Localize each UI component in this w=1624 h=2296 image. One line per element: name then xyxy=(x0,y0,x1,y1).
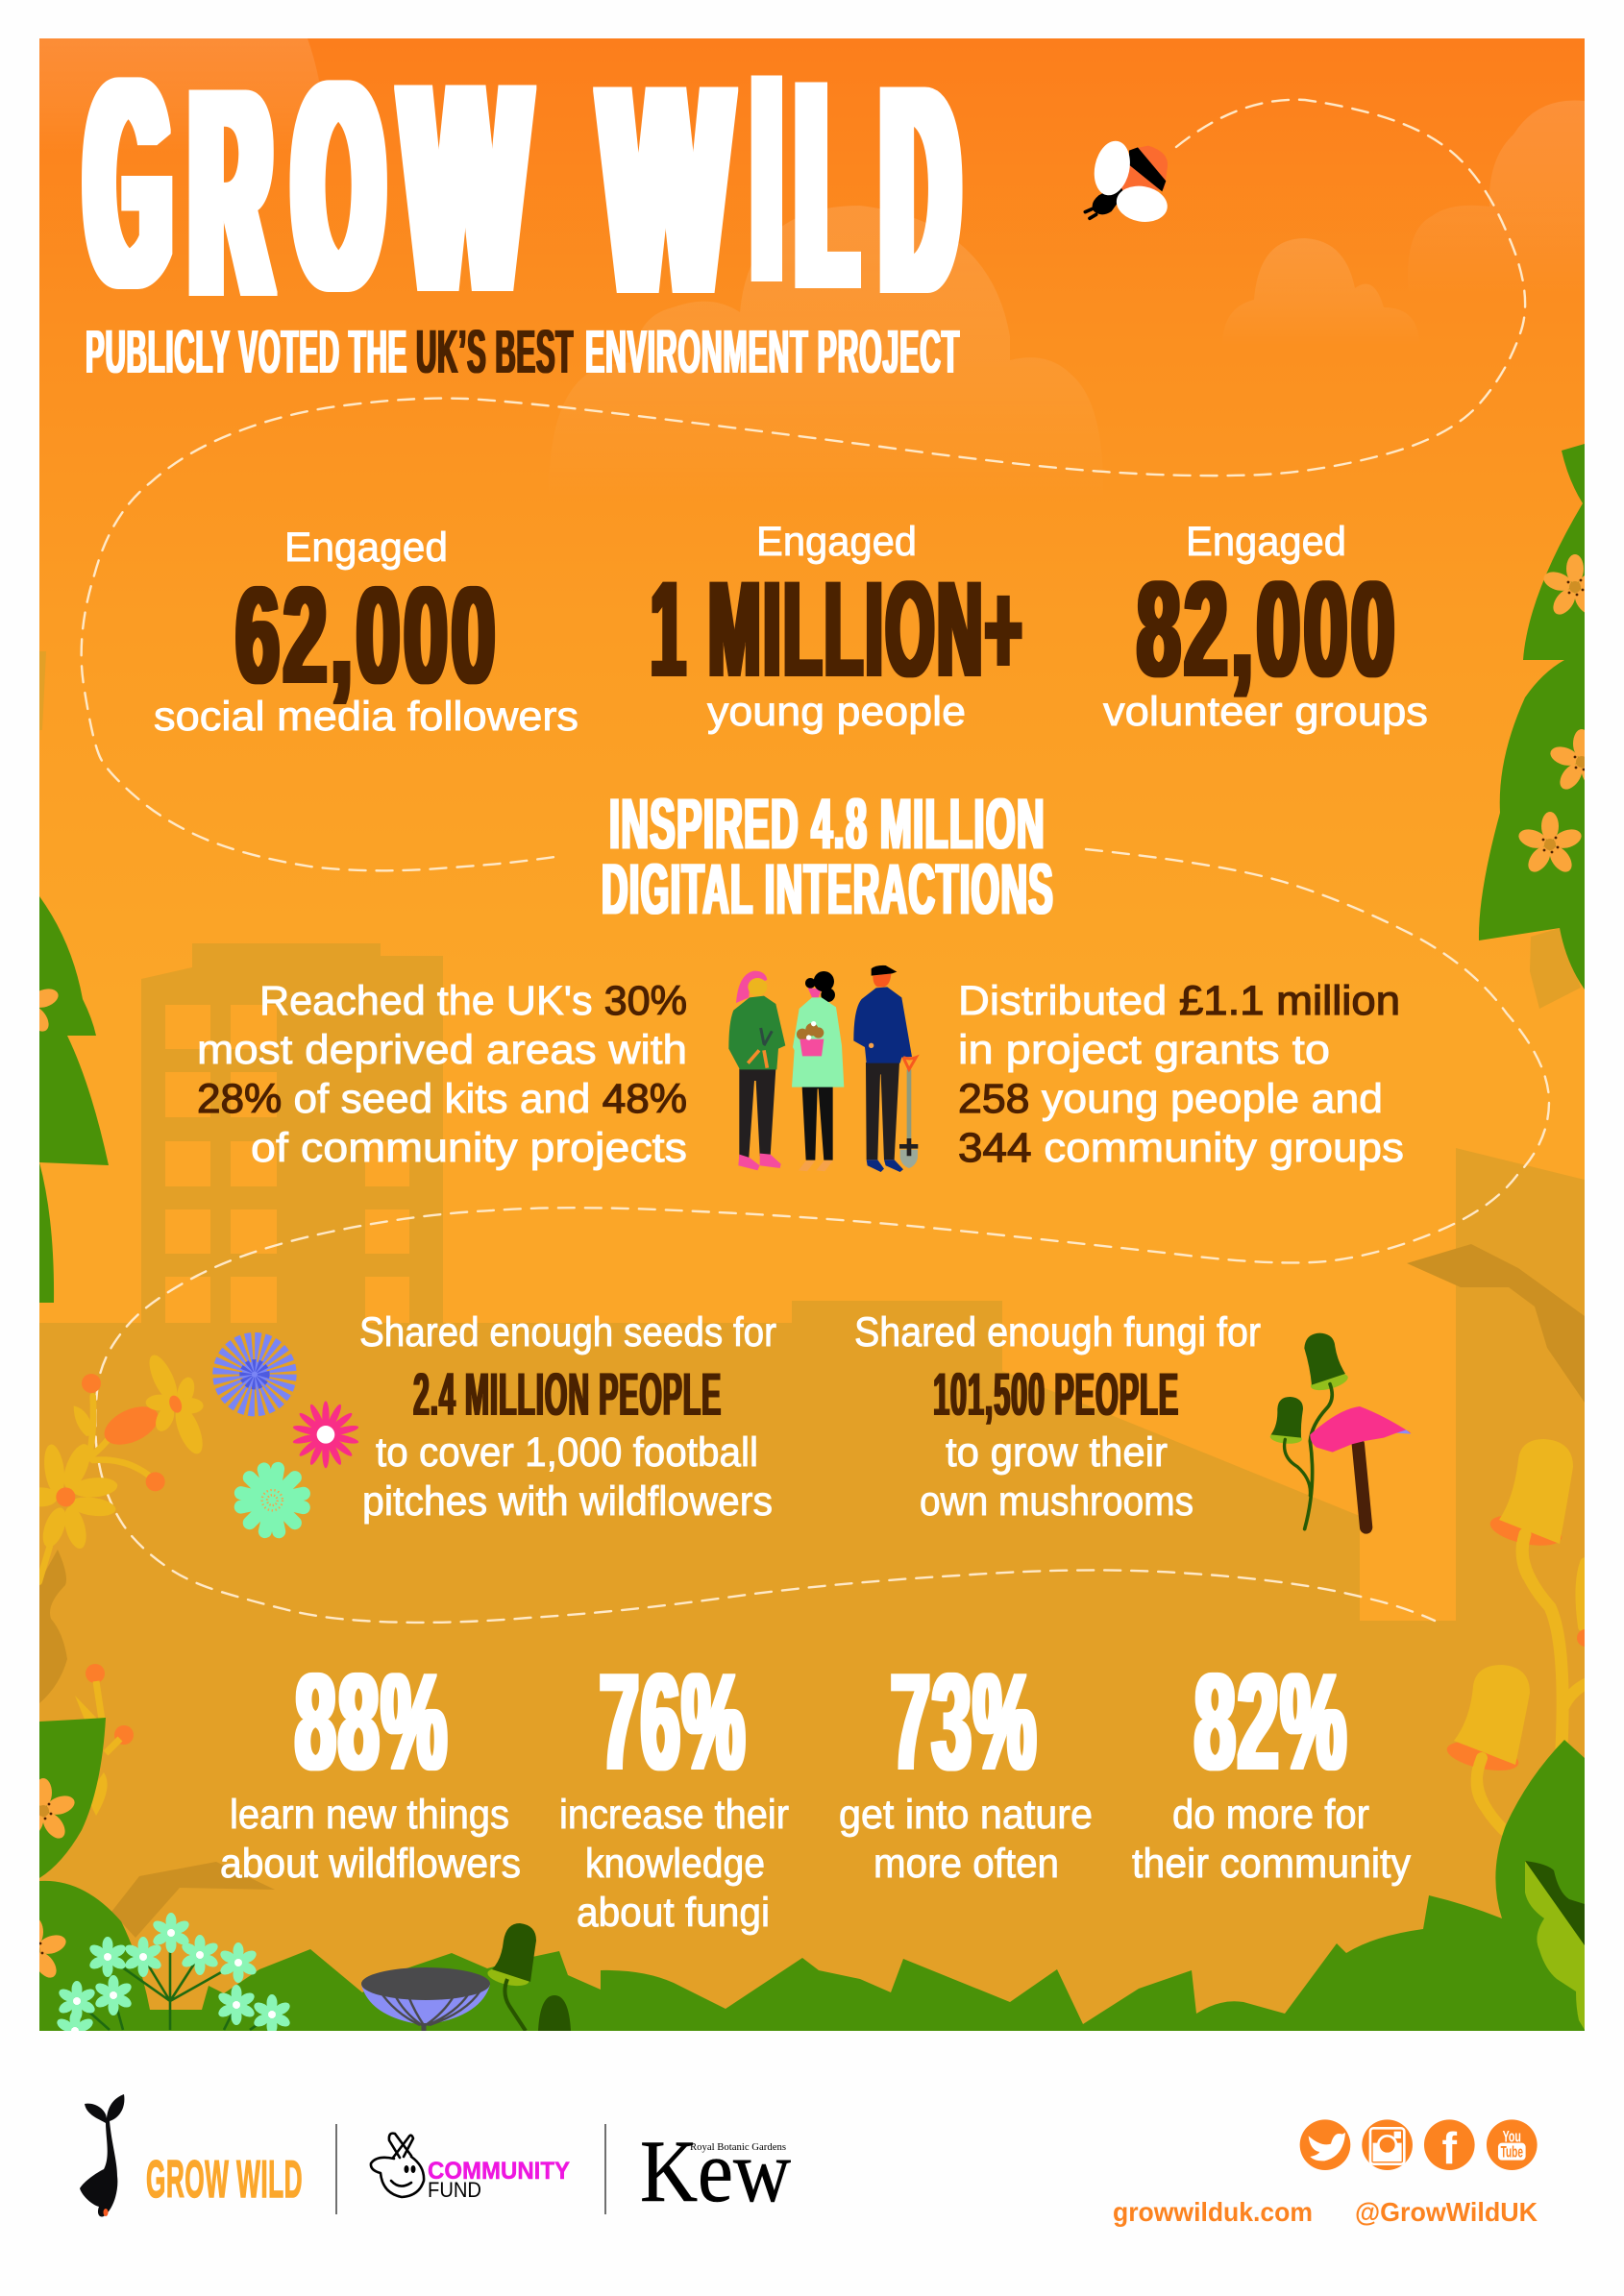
person with spade xyxy=(853,965,918,1172)
icon: blue flower xyxy=(228,1347,282,1402)
icon: facebook: f xyxy=(1442,2123,1458,2173)
social handle: @GrowWildUK xyxy=(1355,2197,1538,2227)
icon: seed bowl xyxy=(361,1967,490,2031)
text block: project grants: Distributed £1.1 million xyxy=(958,978,1400,1024)
stat: do more for community: do more for xyxy=(1172,1792,1369,1838)
stat: nature more often: more often xyxy=(874,1841,1059,1887)
icon: three gardeners xyxy=(728,965,918,1172)
text block: fungi shared: to grow their xyxy=(946,1429,1168,1476)
text block: deprived areas: most deprived areas with xyxy=(197,1027,687,1073)
logo: Kew: Royal Botanic Gardens xyxy=(690,2141,786,2153)
icon: left tree xyxy=(39,896,109,1303)
stat: knowledge about fungi xyxy=(559,1646,789,1936)
text block: seeds shared: 2.4 MILLION PEOPLE xyxy=(413,1361,722,1429)
cityscape silhouette xyxy=(39,651,1585,2031)
title: GROW WILD: R xyxy=(191,28,270,356)
clouds xyxy=(39,38,1585,425)
website link: growwilduk.com xyxy=(1113,2197,1313,2227)
text block: fungi shared xyxy=(854,1309,1261,1525)
stat: knowledge about fungi: increase their xyxy=(559,1792,789,1838)
stat: nature more often xyxy=(839,1646,1093,1887)
stat: learn about wildflowers: learn new things xyxy=(230,1792,509,1838)
footer: logos and social links xyxy=(80,2094,1538,2227)
divider xyxy=(604,2124,606,2214)
footer: logos and social links: GROW WILD xyxy=(146,2149,303,2209)
logo: Grow Wild xyxy=(80,2094,303,2217)
icon: youtube: You xyxy=(1503,2127,1521,2145)
panel: orange background scene: ENVIRONMENT PROJECT xyxy=(585,317,960,386)
stat: do more for community: 82% xyxy=(1194,1646,1348,1798)
dashed bee trail xyxy=(82,100,1549,1623)
text block: deprived areas xyxy=(197,978,687,1171)
text block: project grants xyxy=(958,978,1404,1171)
subtitle xyxy=(86,330,960,373)
stat: young people xyxy=(651,519,1024,735)
icon: green mushrooms bottom xyxy=(486,1923,571,2031)
icon: bee xyxy=(1085,137,1170,226)
icon: mint flower xyxy=(241,1469,304,1531)
social icons xyxy=(1300,2119,1538,2173)
stat: knowledge about fungi: knowledge xyxy=(585,1841,765,1887)
logo: Community Fund: COMMUNITY xyxy=(428,2158,570,2185)
title: GROW WILD: W xyxy=(404,25,528,353)
icon: umbel flower xyxy=(57,1913,290,2031)
stat: volunteer groups: Engaged xyxy=(1186,519,1346,565)
logo: Community Fund xyxy=(371,2134,570,2202)
title: GROW WILD: O xyxy=(295,22,382,351)
icon: yellow wildflowers left xyxy=(26,1347,359,1582)
text block: fungi shared: Shared enough fungi for xyxy=(854,1309,1261,1356)
text block: project grants: 258 young people and xyxy=(958,1076,1383,1122)
text block: fungi shared: own mushrooms xyxy=(920,1478,1193,1525)
stat: volunteer groups xyxy=(1103,519,1428,735)
stat: social media followers: 62,000 xyxy=(235,559,499,712)
logo: Kew: Kew xyxy=(640,2122,792,2220)
text block: seeds shared: to cover 1,000 football xyxy=(376,1429,758,1476)
icon: right tree with flowers xyxy=(1478,444,1585,989)
left side plants xyxy=(39,1664,134,1878)
text block: deprived areas: of community projects xyxy=(251,1125,687,1171)
text block: fungi shared: 101,500 PEOPLE xyxy=(933,1361,1179,1429)
heading: digital interactions: DIGITAL INTERACTIONS xyxy=(602,849,1054,929)
subtitle: PUBLICLY VOTED THE xyxy=(86,317,407,386)
stat: knowledge about fungi: 76% xyxy=(600,1646,747,1798)
icon: twitter xyxy=(1300,2119,1350,2170)
title: GROW WILD xyxy=(82,75,963,296)
logo: Community Fund: FUND xyxy=(428,2178,481,2202)
person with flower pot xyxy=(792,971,844,1171)
title: GROW WILD: I xyxy=(755,13,778,342)
icon: facebook xyxy=(1424,2119,1475,2173)
subtitle: UK’S BEST xyxy=(416,317,574,386)
stat: nature more often: get into nature xyxy=(839,1792,1093,1838)
panel: orange background scene: 1 MILLION+ xyxy=(651,553,1024,704)
title: GROW WILD: D xyxy=(882,24,957,354)
stat: volunteer groups: 82,000 xyxy=(1137,553,1398,704)
stat: do more for community: their community xyxy=(1132,1841,1411,1887)
heading: digital interactions: INSPIRED 4.8 MILLION xyxy=(609,784,1046,864)
heading: digital interactions xyxy=(603,797,1053,915)
icon: yellow mushrooms right xyxy=(1444,1439,1594,1830)
title: GROW WILD: G xyxy=(86,18,169,347)
icon: youtube: Tube xyxy=(1501,2143,1523,2162)
stat: learn about wildflowers: 88% xyxy=(295,1646,449,1798)
person with shears xyxy=(728,971,785,1170)
stat: learn about wildflowers: about wildflowers xyxy=(220,1841,521,1887)
text block: seeds shared xyxy=(359,1309,776,1525)
icon: pink flower xyxy=(292,1401,359,1468)
icon: instagram xyxy=(1362,2119,1413,2170)
stat: nature more often: 73% xyxy=(891,1646,1038,1798)
stat: knowledge about fungi: about fungi xyxy=(577,1890,770,1936)
title: GROW WILD: L xyxy=(799,21,854,350)
text block: project grants: in project grants to xyxy=(958,1027,1330,1073)
icon: youtube xyxy=(1487,2119,1538,2170)
text block: seeds shared: pitches with wildflowers xyxy=(362,1478,773,1525)
title: GROW WILD: W xyxy=(603,27,729,354)
stat: social media followers: social media followers xyxy=(154,694,578,740)
ground foliage xyxy=(1,1740,1585,2051)
stat: young people: Engaged xyxy=(756,519,917,565)
stat: learn about wildflowers xyxy=(220,1646,521,1887)
text block: deprived areas: Reached the UK's 30% xyxy=(259,978,687,1024)
stat: do more for community xyxy=(1132,1646,1411,1887)
text block: seeds shared: Shared enough seeds for xyxy=(359,1309,776,1356)
icon: mushrooms xyxy=(1269,1333,1411,1529)
stat: volunteer groups: volunteer groups xyxy=(1103,689,1428,735)
stat: social media followers: Engaged xyxy=(284,525,448,571)
divider xyxy=(335,2124,337,2214)
text block: deprived areas: 28% of seed kits and 48% xyxy=(197,1076,687,1122)
stat: social media followers xyxy=(154,525,578,740)
text block: project grants: 344 community groups xyxy=(958,1125,1404,1171)
stat: young people: young people xyxy=(707,689,966,735)
